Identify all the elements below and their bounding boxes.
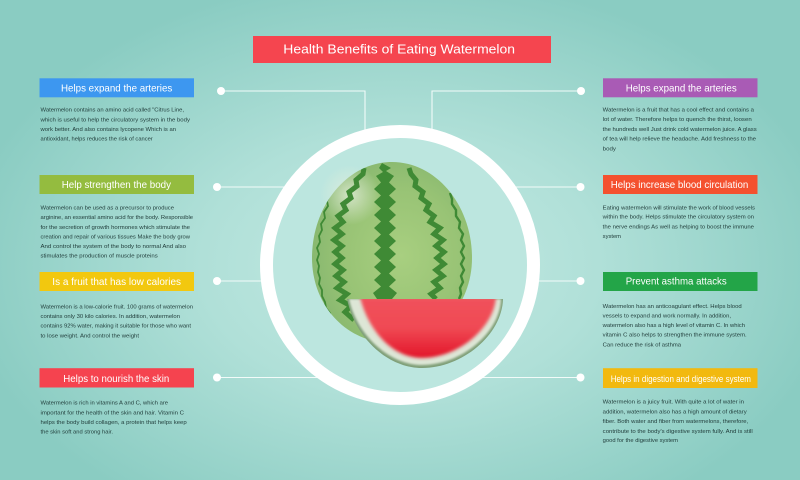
body text: Watermelon is a low-calorie fruit. 100 grams of watermelon xyxy=(40,304,193,310)
body text: good for the digestive system xyxy=(603,438,678,444)
body text: And control the system of the body to normal And also xyxy=(40,244,186,250)
heading xyxy=(40,272,194,291)
body text: creation and repair of various tissues Make the body grow xyxy=(40,235,191,241)
body text xyxy=(602,304,747,348)
body text: work better. And also contains lycopene Which is an xyxy=(39,127,176,133)
heading: Helps increase blood circulation xyxy=(611,179,748,191)
heading xyxy=(603,78,758,97)
body text: contains only 30 kilo calories. In addition, watermelon xyxy=(40,314,180,320)
body text: body xyxy=(603,146,616,152)
title xyxy=(253,36,551,63)
body text: Watermelon is rich in vitamins A and C, which are xyxy=(40,401,168,407)
body text xyxy=(602,205,755,240)
body text: to lose weight. And control the weight xyxy=(40,333,139,339)
body text: fiber. Both water and fiber from watermelons, therefore, xyxy=(603,419,749,425)
body text: addition, watermelon also has a high amount of dietary xyxy=(603,409,747,415)
central ring xyxy=(266,132,534,398)
body text: vitamin C also helps to strengthen the immune system. xyxy=(603,333,747,339)
body text: within the body. Helps stimulate the circulatory system on xyxy=(602,215,754,221)
panel: helps in digestion and digestive system xyxy=(603,368,758,444)
heading xyxy=(40,368,194,388)
heading: Helps expand the arteries xyxy=(61,82,172,94)
body text: the hundreds well Just drink cold watermelon juice. A glass xyxy=(603,127,757,133)
whole melon xyxy=(312,162,472,343)
body text: which is useful to help the circulatory system in the body xyxy=(39,117,190,123)
body text: Watermelon can be used as a precursor to produce xyxy=(40,206,174,212)
heading xyxy=(40,175,194,194)
body text: the nerve endings As well as helping to boost the immune xyxy=(603,224,754,230)
heading xyxy=(603,368,758,388)
heading: Helps in digestion and digestive system xyxy=(611,374,751,385)
body text: Watermelon is a fruit that has a cool effect and contains a xyxy=(603,108,755,114)
heading xyxy=(603,175,758,194)
heading xyxy=(603,272,758,291)
panel: is a fruit that has low calories xyxy=(40,272,194,339)
panel: help strengthen the body xyxy=(40,175,194,260)
body text: vessels to expand and work normally. In addition, xyxy=(603,313,731,319)
body text: Can reduce the risk of asthma xyxy=(603,342,682,348)
panel: helps expand the arteries (right) xyxy=(603,78,758,152)
body text: Watermelon contains an amino acid called "Citrus Line, xyxy=(40,108,184,114)
panel: helps to nourish the skin xyxy=(40,368,194,436)
body text xyxy=(603,400,753,444)
body text: system xyxy=(603,234,621,240)
heading: Prevent asthma attacks xyxy=(626,276,727,288)
body text: Watermelon has an anticoagulant effect. Helps blood xyxy=(603,304,742,310)
panel: helps increase blood circulation xyxy=(602,175,758,240)
body text: Watermelon is a juicy fruit. With quite a lot of water in xyxy=(603,400,744,406)
body text: stimulates the production of muscle proteins xyxy=(40,254,158,260)
body text: contribute to the body's digestive system fully. And is still xyxy=(603,429,753,435)
body text: the skin soft and strong hair. xyxy=(40,430,113,436)
heading: Help strengthen the body xyxy=(62,179,172,191)
body text: arginine, an essential amino acid for the body. Responsible xyxy=(40,215,193,221)
body text: lot of water. Therefore helps to quench the thirst, loosen xyxy=(603,117,752,123)
melon slice xyxy=(345,297,505,369)
body text: of tea will help relieve the headache. Add freshness to the xyxy=(603,137,756,143)
heading: Helps to nourish the skin xyxy=(63,373,169,385)
body text: contains 92% water, making it suitable for those who want xyxy=(40,324,191,330)
body text: helps the body build collagen, a protein that helps keep xyxy=(40,420,187,426)
icon: watermelon xyxy=(312,162,505,369)
panel: prevent asthma attacks xyxy=(602,272,758,348)
body text: for the secretion of growth hormones which stimulate the xyxy=(40,225,190,231)
panel: helps expand the arteries (left) xyxy=(39,78,194,143)
heading xyxy=(40,78,194,97)
heading: Helps expand the arteries xyxy=(626,82,737,94)
body text xyxy=(40,401,187,436)
body text: important for the health of the skin and hair. Vitamin C xyxy=(40,410,184,416)
body text: Eating watermelon will stimulate the work of blood vessels xyxy=(603,205,755,211)
title: Health Benefits of Eating Watermelon xyxy=(283,42,515,56)
body text: watermelon also has a high level of vitamin C. In which xyxy=(602,323,745,329)
body text xyxy=(39,108,190,143)
heading: Is a fruit that has low calories xyxy=(52,276,181,288)
body text: antioxidant, helps reduces the risk of cancer xyxy=(40,137,153,143)
body text xyxy=(40,206,193,260)
body text xyxy=(40,304,193,339)
connector lines and dots xyxy=(213,87,585,382)
body text xyxy=(603,108,757,152)
